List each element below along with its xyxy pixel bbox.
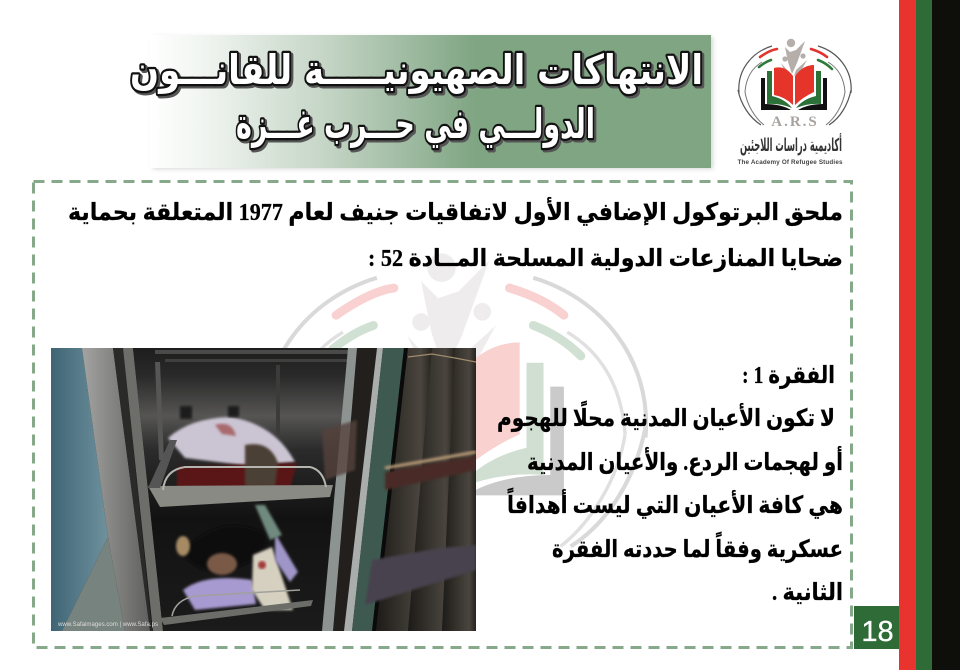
background watermark logo [261, 253, 646, 546]
paragraph: article text: أو لهجمات الردع. والأعيان المدنية [527, 446, 843, 476]
wall [51, 348, 108, 631]
logo: Academy of Refugee Studies [738, 39, 851, 166]
logo letters A.R.S: A.R.S [771, 114, 819, 130]
cabinet frame [82, 348, 150, 631]
paragraph: article text: الفقرة 1 : [742, 363, 835, 389]
paragraph: article text [497, 363, 843, 606]
title line 2: الدولـــي في حـــرب غـــزة [236, 100, 595, 149]
dashed content frame [34, 182, 852, 648]
heading text: ملحق البرتوكول الإضافي الأول لاتفاقيات جنيف لعام 1977 المتعلقة بحماية [68, 197, 843, 226]
cabinet interior [133, 348, 357, 631]
upper tray [148, 440, 333, 507]
paragraph: article text: الثانية . [772, 580, 843, 606]
paragraph: article text: لا تكون الأعيان المدنية محلًا للهجوم [497, 401, 835, 432]
title line 1: الانتهاكات الصهيونيـــــة للقانـــون [132, 48, 705, 96]
title line 2 [236, 100, 597, 151]
page number badge: 18 [861, 616, 894, 648]
logo english name: The Academy Of Refugee Studies [738, 159, 843, 166]
paragraph: article text: عسكرية وفقاً لما حددته الفقرة [552, 532, 843, 563]
heading text: ضحايا المنازعات الدولية المسلحة المــادة 52 : [368, 246, 843, 272]
lower tray [160, 590, 313, 625]
open door [322, 348, 476, 631]
right colour stripes [899, 0, 960, 670]
photo credit: www.Safaimages.com | www.Safa.ps [57, 621, 158, 628]
title line 2: الدولـــي في حـــرب غـــزة [238, 102, 597, 151]
photo: morgue refrigerator compartment (abstracted) [51, 348, 476, 631]
title line 1: الانتهاكات الصهيونيـــــة للقانـــون [130, 46, 703, 94]
title banner [130, 35, 713, 169]
paragraph: article text: هي كافة الأعيان التي ليست أهدافاً [507, 488, 843, 519]
upper tray covered form [168, 406, 297, 488]
logo: Academy of Refugee Studies: أكاديمية دراسات اللاجئين [740, 133, 842, 156]
heading text [68, 197, 843, 272]
lower tray covered form [176, 505, 298, 610]
page number badge [854, 606, 899, 649]
